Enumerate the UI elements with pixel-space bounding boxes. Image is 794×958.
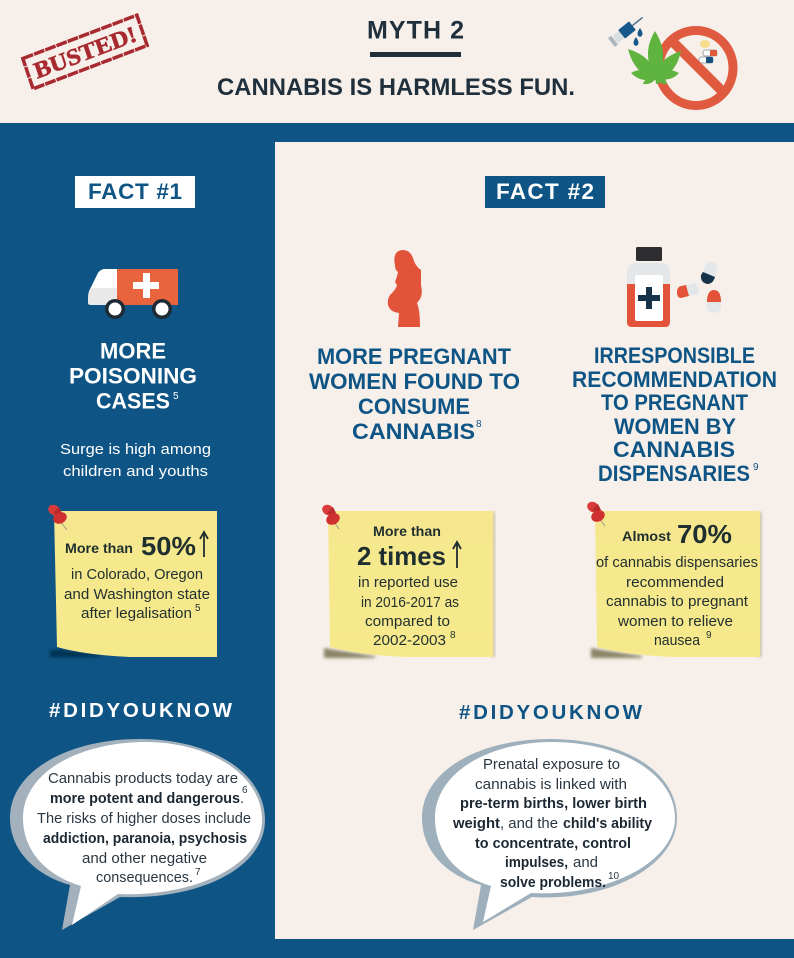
heading: irresponsible recommendation: TO PREGNANT	[601, 390, 748, 415]
sticky note: 2 times	[320, 503, 495, 658]
icon: medicine bottle and pills	[627, 247, 721, 327]
speech bubble: potency: and other negative	[82, 851, 207, 867]
heading: pregnant women	[309, 344, 520, 444]
speech bubble: prenatal exposure: to concentrate, control	[475, 836, 631, 852]
speech bubble: potency	[10, 739, 265, 930]
heading: irresponsible recommendation: DISPENSARIES	[598, 461, 750, 486]
heading: more poisoning cases: 5	[173, 391, 179, 402]
icon: pregnant silhouette	[388, 250, 422, 327]
heading: more poisoning cases	[69, 338, 197, 414]
panel: fact 1 column background	[0, 142, 275, 958]
panel: fact 2 column background	[275, 142, 794, 939]
label: fact 2: FACT #2	[496, 179, 594, 204]
sticky note: 2 times: 8	[450, 630, 456, 641]
icon: prohibited drugs	[608, 13, 733, 106]
heading: pregnant women: WOMEN FOUND TO	[309, 369, 520, 394]
sticky note: 2 times: in 2016-2017 as	[361, 595, 459, 611]
sticky note: 70 percent: recommended	[626, 575, 724, 591]
label: fact 1: FACT #1	[88, 179, 182, 204]
sticky note: 70 percent: nausea	[654, 633, 701, 649]
speech bubble: prenatal exposure: , and the	[500, 816, 558, 832]
sticky note: 50 percent: 5	[195, 603, 201, 614]
sticky note: 2 times: in reported use	[358, 575, 458, 591]
heading: irresponsible recommendation	[572, 343, 777, 486]
heading: more poisoning cases: POISONING	[69, 364, 197, 388]
sticky note: 70 percent: of cannabis dispensaries	[596, 555, 758, 571]
speech bubble: potency: Cannabis products today are	[48, 771, 238, 787]
stamp: busted	[23, 15, 147, 89]
heading: did you know right: #DIDYOUKNOW	[459, 701, 643, 724]
sticky note: 2 times: 2002-2003	[373, 633, 446, 649]
text: surge note: Surge is high among	[60, 441, 211, 458]
speech bubble: potency: more potent and dangerous	[50, 791, 240, 807]
sticky note: 2 times: More than	[373, 524, 441, 539]
heading: myth number: MYTH 2	[367, 16, 464, 44]
speech bubble: potency: .	[240, 791, 244, 807]
speech bubble: potency: addiction, paranoia, psychosis	[43, 831, 247, 847]
speech bubble: prenatal exposure: cannabis is linked with	[475, 777, 627, 793]
speech bubble: potency: consequences.	[96, 870, 193, 886]
speech bubble: prenatal exposure: 10	[608, 871, 620, 882]
speech bubble: prenatal exposure: and	[573, 855, 598, 871]
speech bubble: prenatal exposure: Prenatal exposure to	[483, 757, 620, 773]
speech bubble: potency: The risks of higher doses include	[37, 811, 251, 827]
divider bar	[370, 52, 461, 57]
heading: pregnant women: CANNABIS	[352, 419, 475, 444]
sticky note: 70 percent: cannabis to pregnant	[606, 594, 748, 610]
sticky note: 70 percent: women to relieve	[617, 614, 733, 630]
heading: pregnant women: 8	[476, 419, 482, 430]
bottom band	[275, 939, 794, 958]
stamp: busted: BUSTED!	[31, 21, 140, 83]
sticky note: 50 percent: 50%	[141, 531, 196, 561]
speech bubble: potency: 7	[195, 867, 201, 878]
panel: fact 1	[10, 176, 265, 930]
speech bubble: potency: 6	[242, 785, 248, 796]
sticky note: 50 percent: More than	[65, 541, 133, 556]
top band	[0, 123, 794, 142]
heading: irresponsible recommendation: IRRESPONSIBLE	[594, 343, 755, 368]
sticky note: 50 percent: and Washington state	[64, 587, 210, 603]
heading: did you know left: #DIDYOUKNOW	[49, 699, 233, 722]
heading: irresponsible recommendation: CANNABIS	[613, 437, 735, 462]
icon: red pin	[320, 503, 342, 529]
heading: more poisoning cases: CASES	[96, 388, 170, 414]
label: fact 2	[485, 176, 605, 208]
heading: pregnant women: CONSUME	[358, 394, 470, 419]
heading: irresponsible recommendation: WOMEN BY	[614, 414, 736, 439]
sticky note: 70 percent	[585, 500, 762, 658]
heading: irresponsible recommendation: 9	[753, 462, 759, 473]
sticky note: 2 times: 2 times	[357, 541, 446, 571]
icon: red pin	[585, 500, 607, 526]
speech bubble: prenatal exposure: pre-term births, lower birth	[460, 796, 647, 812]
panel: fact 2	[309, 176, 777, 930]
icon: ambulance	[88, 269, 178, 319]
icon: red pin	[46, 503, 69, 530]
panel: header band	[23, 13, 733, 106]
sticky note: 50 percent: after legalisation	[81, 606, 192, 622]
sticky note: 2 times: compared to	[365, 614, 450, 630]
text: surge note: children and youths	[63, 463, 208, 480]
heading: pregnant women: MORE PREGNANT	[317, 344, 511, 369]
text: surge note	[60, 441, 211, 480]
heading: more poisoning cases: MORE	[100, 338, 166, 364]
speech bubble: prenatal exposure: impulses,	[505, 855, 568, 871]
sticky note: 70 percent: Almost	[622, 529, 672, 544]
sticky note: 70 percent: 70%	[677, 519, 732, 549]
speech bubble: prenatal exposure: weight	[452, 816, 500, 832]
heading: irresponsible recommendation: RECOMMENDATION	[572, 367, 777, 392]
sticky note: 50 percent	[46, 503, 217, 657]
speech bubble: prenatal exposure: child's ability	[563, 816, 652, 832]
heading: myth statement: CANNABIS IS HARMLESS FUN.	[217, 74, 575, 101]
sticky note: 70 percent: 9	[706, 630, 712, 641]
sticky note: 50 percent: in Colorado, Oregon	[71, 567, 203, 583]
speech bubble: prenatal exposure	[422, 739, 677, 930]
speech bubble: prenatal exposure: solve problems.	[500, 875, 606, 891]
label: fact 1	[75, 176, 195, 208]
